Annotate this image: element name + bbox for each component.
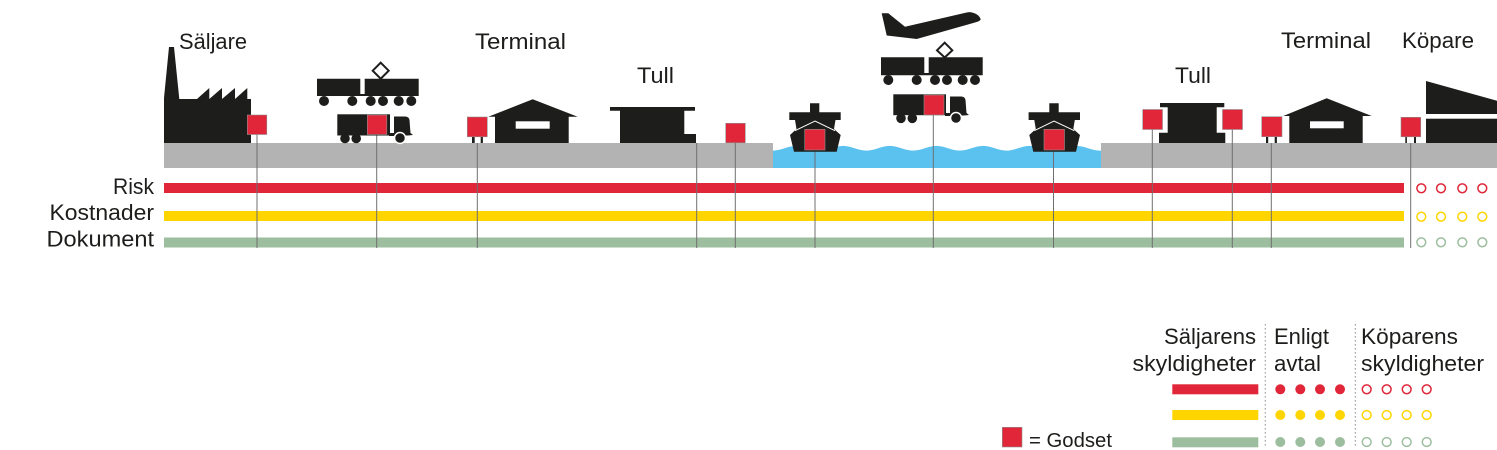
heading: Köpare: Köpare <box>1402 28 1474 53</box>
legend: buyer heading: Köparens <box>1361 324 1458 349</box>
heading: Säljare: Säljare <box>179 29 247 54</box>
heading: Tull: Tull <box>637 63 674 88</box>
legend: contract heading: avtal <box>1274 351 1321 376</box>
goods before customs <box>1143 110 1162 130</box>
icon: ship with goods <box>789 103 841 152</box>
icon: buyer building <box>1426 81 1497 143</box>
buyer risk circles <box>1417 184 1487 193</box>
icon: ship 2 with goods <box>1029 103 1080 152</box>
legend: contract heading: Enligt <box>1274 324 1329 349</box>
icon: customs building destination <box>1159 103 1225 143</box>
heading: Terminal destination: Terminal <box>1281 28 1371 53</box>
risk bar <box>164 183 1404 193</box>
label: Risk: Risk <box>113 174 155 199</box>
legend: buyer heading <box>1361 324 1484 376</box>
buyer cost circles <box>1417 212 1487 221</box>
goods at terminal with legs <box>467 117 487 143</box>
legend: contract heading <box>1274 324 1329 376</box>
heading: Terminal: Terminal <box>475 29 566 54</box>
legend: buyer circles <box>1362 385 1431 446</box>
legend: seller heading: skyldigheter <box>1132 351 1256 376</box>
legend: buyer heading: skyldigheter <box>1361 351 1484 376</box>
label: Kostnader: Kostnader <box>50 200 155 225</box>
goods after customs <box>1222 110 1242 130</box>
legend: contract dots <box>1275 384 1345 447</box>
icon: factory <box>164 47 251 143</box>
goods at buyer with legs <box>1401 117 1421 143</box>
legend: seller heading <box>1132 324 1256 376</box>
label: Dokument: Dokument <box>46 226 155 252</box>
icon: customs building <box>610 107 696 143</box>
goods before port <box>726 123 745 143</box>
document bar <box>164 238 1404 248</box>
icon: airplane <box>882 12 981 39</box>
water <box>773 146 1101 168</box>
cost bar <box>164 211 1404 221</box>
goods at seller <box>247 115 267 134</box>
legend: goods symbol <box>1002 427 1112 450</box>
heading: Tull destination: Tull <box>1175 63 1211 88</box>
ground: land right <box>1101 143 1497 168</box>
icon: truck centre with goods <box>893 94 969 124</box>
legend: dotted dividers <box>1265 324 1355 447</box>
legend: seller heading: Säljarens <box>1164 324 1256 349</box>
icon: train centre <box>881 43 983 85</box>
goods drop lines <box>257 115 1411 248</box>
icon: train <box>317 63 419 106</box>
ground: land left <box>164 143 773 168</box>
buyer document circles <box>1417 238 1487 247</box>
goods at terminal destination <box>1262 117 1282 143</box>
icon: warehouse <box>488 99 578 143</box>
icon: truck with goods <box>337 114 413 144</box>
legend: seller bars <box>1172 384 1258 447</box>
icon: warehouse destination <box>1283 98 1372 143</box>
